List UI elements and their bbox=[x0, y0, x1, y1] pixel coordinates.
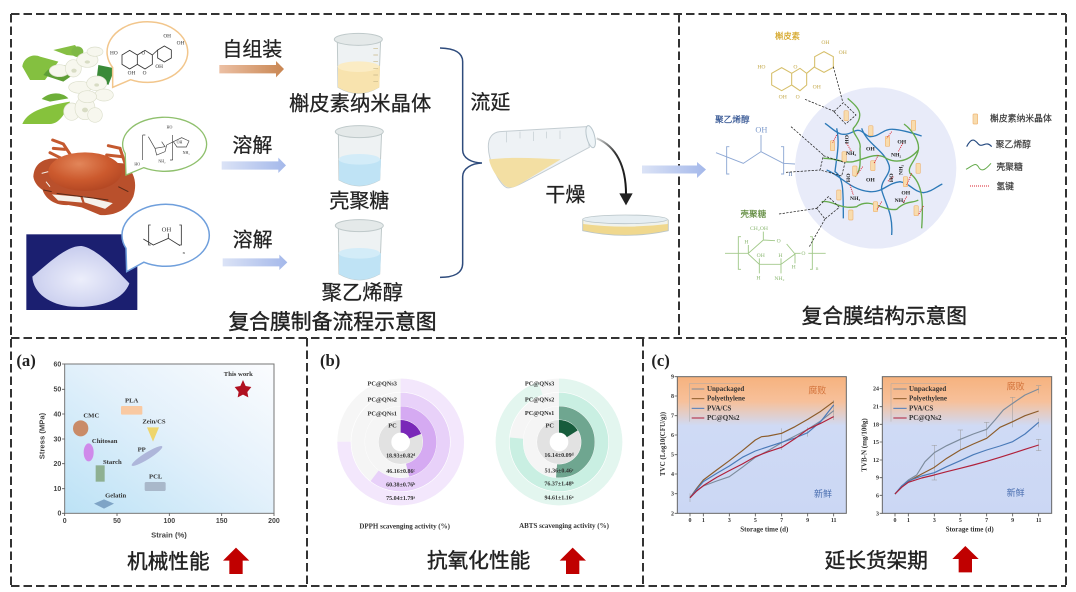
brace bbox=[440, 48, 482, 277]
chart: TVB-N: 24 bbox=[873, 387, 879, 393]
image: PVA powder bbox=[26, 234, 137, 310]
chart: TVB-N: 新鲜 bbox=[1007, 487, 1025, 498]
chart: TVB-N: Polyethylene bbox=[909, 395, 947, 403]
chart: stress vs strain: Stress (MPa) bbox=[37, 412, 46, 459]
chart: DPPH radial bars: PC@QNs1 bbox=[368, 411, 397, 418]
structure: quercetin: OH bbox=[779, 94, 787, 100]
chart: ABTS radial bars: ABTS scavenging activity (%) bbox=[519, 522, 610, 530]
icon: chitosan speech bubble: OH bbox=[177, 139, 183, 144]
circle: composite film network: OH bbox=[866, 178, 875, 184]
chart: TVC: 7 bbox=[671, 414, 674, 420]
chart: stress vs strain: 0 bbox=[57, 511, 61, 518]
structure: chitosan: O bbox=[777, 239, 781, 245]
chart: stress vs strain: 40 bbox=[54, 411, 61, 418]
chart: stress vs strain bbox=[37, 361, 280, 539]
chart: stress vs strain: 20 bbox=[54, 461, 61, 468]
icon: quercetin speech bubble: HO bbox=[110, 51, 118, 57]
chart: TVC: 3 bbox=[728, 518, 731, 524]
panel: preparation flow bbox=[22, 22, 437, 334]
structure: chitosan bbox=[725, 208, 826, 282]
chart: TVC: Polyethylene bbox=[707, 395, 745, 403]
icon: quercetin speech bubble: OH bbox=[155, 64, 163, 70]
structure: polyvinyl alcohol: n bbox=[788, 169, 792, 178]
icon: quercetin speech bubble: O bbox=[141, 50, 145, 56]
chart: TVC bbox=[659, 375, 846, 534]
chart: stress vs strain: 200 bbox=[268, 518, 280, 525]
circle: composite film network: NH₂ bbox=[891, 153, 901, 159]
structure: chitosan: CH₂OH bbox=[750, 226, 768, 232]
structure: quercetin: OH bbox=[839, 50, 847, 56]
icon: chitosan speech bubble bbox=[123, 117, 207, 175]
chart: TVB-N: 6 bbox=[876, 493, 879, 499]
chart: ABTS radial bars: 51.36±0.46ᶜ bbox=[545, 468, 574, 474]
chart: TVB-N: PVA/CS bbox=[909, 404, 933, 412]
chart: TVC: 新鲜 bbox=[814, 488, 832, 499]
label: 聚乙烯醇: 聚乙烯醇 bbox=[322, 282, 403, 305]
icon: quercetin speech bubble: O bbox=[143, 70, 147, 76]
chart: ABTS radial bars: PC@QNs2 bbox=[525, 396, 554, 403]
chart: DPPH radial bars: DPPH scavenging activity (%) bbox=[359, 522, 451, 530]
icon: PVA speech bubble bbox=[122, 204, 209, 272]
chart: TVC: 4 bbox=[671, 472, 674, 478]
chart: DPPH radial bars: 18.93±0.82ᵈ bbox=[386, 454, 415, 460]
label: (a): (a) bbox=[16, 351, 36, 370]
chart: stress vs strain: PCL bbox=[149, 473, 163, 480]
icon: quercetin speech bubble: OH bbox=[177, 41, 185, 47]
circle: composite film network: NH₂ bbox=[895, 198, 905, 204]
chart: TVC: PVA/CS bbox=[707, 404, 731, 412]
legend: structure: 壳聚糖 bbox=[996, 161, 1023, 172]
chart: ABTS radial bars: PC@QNs3 bbox=[525, 381, 554, 388]
chart: stress vs strain: 60 bbox=[54, 361, 61, 368]
chart: DPPH radial bars: PC@QNs3 bbox=[368, 381, 397, 388]
chart: stress vs strain: 0 bbox=[63, 518, 67, 525]
chart: TVB-N: Unpackaged bbox=[909, 385, 946, 393]
label: 溶解 1: 溶解 bbox=[232, 134, 272, 157]
chart: ABTS radial bars: PC bbox=[546, 422, 554, 429]
circle: composite film network: OH bbox=[843, 135, 849, 144]
arrow: up bbox=[223, 548, 249, 574]
chart: stress vs strain: 100 bbox=[164, 518, 175, 525]
icon: quercetin speech bubble: OH bbox=[163, 34, 171, 40]
circle: composite film network: OH bbox=[897, 140, 907, 146]
chart: ABTS radial bars: 76.37±1.48ᵇ bbox=[544, 482, 574, 488]
image: locust flowers and leaves bbox=[22, 45, 115, 124]
chart: TVB-N bbox=[860, 377, 1052, 534]
icon: beaker with chitosan bbox=[335, 126, 383, 186]
structure: chitosan: O bbox=[801, 251, 805, 257]
structure: chitosan: NH₂ bbox=[774, 276, 785, 282]
structure: chitosan: OH bbox=[757, 253, 765, 259]
structure: chitosan: H bbox=[744, 239, 748, 245]
chart: stress vs strain: CMC bbox=[83, 413, 99, 420]
legend: structure: 槲皮素纳米晶体 bbox=[990, 112, 1052, 123]
structure: polyvinyl alcohol: 聚乙烯醇 bbox=[715, 113, 750, 124]
chart: stress vs strain: 50 bbox=[54, 387, 61, 394]
chart: TVC: 腐败 bbox=[808, 384, 826, 395]
structure: chitosan: H bbox=[792, 264, 796, 270]
structure: polyvinyl alcohol bbox=[715, 113, 795, 178]
chart: TVC: 5 bbox=[754, 518, 757, 524]
chart: stress vs strain: Chitosan bbox=[92, 438, 118, 445]
chart: stress vs strain: This work bbox=[224, 371, 253, 378]
circle: composite film network: OH bbox=[901, 190, 911, 196]
structure: quercetin: O bbox=[793, 64, 797, 70]
image: crab bbox=[33, 140, 135, 215]
chart: TVB-N: 腐败 bbox=[1007, 380, 1025, 391]
circle: composite film network: NH₂ bbox=[850, 196, 860, 202]
panel: (c) shelf life bbox=[651, 351, 1052, 573]
arrow: up bbox=[560, 548, 586, 574]
icon: chitosan speech bubble: NH₂ bbox=[183, 150, 190, 155]
icon: PVA speech bubble: OH bbox=[162, 226, 171, 233]
chart: TVC: PC@QNs2 bbox=[707, 414, 740, 422]
chart: ABTS radial bars: 94.61±1.16ᵃ bbox=[545, 495, 574, 501]
label: 溶解 2: 溶解 bbox=[233, 228, 273, 251]
chart: DPPH radial bars bbox=[344, 381, 457, 530]
circle: composite film network: OH bbox=[887, 173, 893, 183]
chart: TVC: Unpackaged bbox=[707, 385, 744, 393]
circle: composite film network: NH₂ bbox=[899, 165, 905, 175]
chart: TVC: Storage time (d) bbox=[740, 526, 789, 534]
panel: (b) antioxidant properties bbox=[320, 351, 616, 574]
panel: film structure bbox=[715, 31, 1052, 328]
chart: ABTS radial bars bbox=[502, 381, 616, 530]
chart: stress vs strain: PLA bbox=[125, 397, 139, 404]
icon: quercetin speech bubble bbox=[107, 22, 188, 87]
label: 自组装: 自组装 bbox=[222, 38, 282, 61]
chart: DPPH radial bars: 60.38±0.76ᵇ bbox=[386, 482, 415, 488]
chart: TVC: 9 bbox=[806, 518, 809, 524]
chart: TVC: 6 bbox=[671, 433, 674, 439]
heading: 抗氧化性能: 抗氧化性能 bbox=[427, 550, 530, 573]
icon: petri dish bbox=[583, 215, 668, 235]
chart: TVB-N: PC@QNs2 bbox=[909, 414, 942, 422]
chart: TVB-N: 7 bbox=[985, 518, 988, 524]
arrow: up bbox=[952, 546, 979, 572]
chart: TVB-N: 3 bbox=[933, 518, 936, 524]
panel: casting and drying bbox=[440, 48, 668, 277]
chart: stress vs strain: 50 bbox=[113, 518, 121, 525]
heading: 延长货架期: 延长货架期 bbox=[825, 550, 928, 573]
chart: TVC: 1 bbox=[702, 518, 705, 524]
chart: TVC: 0 bbox=[688, 518, 691, 524]
structure: quercetin bbox=[757, 31, 847, 100]
chart: stress vs strain: Starch bbox=[103, 459, 122, 466]
chart: DPPH radial bars: 46.16±0.86ᶜ bbox=[386, 469, 415, 475]
arrow: pouring into dish bbox=[597, 138, 633, 205]
chart: TVB-N: 1 bbox=[907, 518, 910, 524]
circle: composite film network: OH bbox=[845, 173, 851, 183]
title: preparation flow: 复合膜制备流程示意图 bbox=[228, 311, 437, 334]
chart: TVC: 3 bbox=[671, 492, 674, 498]
panel: (a) mechanical properties bbox=[16, 351, 280, 574]
chart: TVB-N: 21 bbox=[873, 405, 879, 411]
label: 干燥: 干燥 bbox=[545, 183, 585, 206]
arrow: dissolve 1 bbox=[222, 158, 286, 173]
chart: TVB-N: 9 bbox=[1011, 518, 1014, 524]
chart: DPPH radial bars: PC bbox=[388, 423, 397, 430]
chart: TVC: 11 bbox=[831, 518, 836, 524]
chart: TVB-N: 15 bbox=[873, 440, 879, 446]
label: (b): (b) bbox=[320, 351, 340, 370]
legend: structure: 聚乙烯醇 bbox=[996, 138, 1031, 149]
label: 壳聚糖: 壳聚糖 bbox=[329, 190, 389, 213]
chart: TVB-N: 18 bbox=[873, 422, 879, 428]
label: 槲皮素纳米晶体: 槲皮素纳米晶体 bbox=[289, 92, 431, 115]
chart: ABTS radial bars: 16.14±0.09ᵈ bbox=[544, 453, 574, 459]
chart: ABTS radial bars: PC@QNs1 bbox=[525, 410, 554, 417]
circle: composite film network: OH bbox=[866, 146, 875, 152]
structure: quercetin: HO bbox=[757, 65, 766, 71]
chart: TVC: TVC (Log10(CFU/g)) bbox=[659, 411, 667, 476]
circle: composite film network: NH₂ bbox=[846, 151, 856, 157]
chart: TVB-N: Storage time (d) bbox=[946, 526, 994, 534]
legend: structure: 氢键 bbox=[996, 180, 1014, 191]
chart: TVB-N: 9 bbox=[876, 476, 879, 482]
chart: stress vs strain: Strain (%) bbox=[151, 530, 187, 539]
title: film structure: 复合膜结构示意图 bbox=[802, 305, 967, 328]
structure: quercetin: OH bbox=[821, 40, 830, 46]
structure: chitosan: H bbox=[756, 275, 760, 281]
chart: stress vs strain: 10 bbox=[54, 486, 61, 493]
structure: chitosan: n bbox=[816, 266, 819, 272]
chart: DPPH radial bars: PC@QNs2 bbox=[368, 396, 397, 403]
chart: TVC: 2 bbox=[671, 511, 674, 517]
arrow: dissolve 2 bbox=[223, 255, 287, 270]
heading: 机械性能: 机械性能 bbox=[127, 550, 210, 573]
icon: conical flask pouring bbox=[488, 125, 597, 188]
label: 流延: 流延 bbox=[470, 91, 510, 114]
chart: TVB-N: 0 bbox=[893, 518, 896, 524]
structure: chitosan: H bbox=[778, 253, 782, 259]
chart: stress vs strain: 150 bbox=[216, 518, 228, 525]
structure: quercetin: 槲皮素 bbox=[775, 31, 800, 41]
structure: quercetin: O bbox=[796, 94, 800, 100]
icon: chitosan speech bubble: NH₂ bbox=[158, 159, 166, 164]
chart: TVC: 8 bbox=[671, 394, 674, 400]
chart: TVC: 9 bbox=[671, 375, 674, 381]
chart: TVB-N: 5 bbox=[959, 518, 962, 524]
chart: TVB-N: 11 bbox=[1036, 518, 1041, 524]
label: (c): (c) bbox=[651, 351, 670, 370]
chart: TVC: 5 bbox=[671, 453, 674, 459]
chart: stress vs strain: Gelatin bbox=[105, 492, 127, 499]
icon: chitosan speech bubble: HO bbox=[134, 161, 140, 166]
chart: stress vs strain: 30 bbox=[54, 436, 61, 443]
arrow: self-assembly bbox=[219, 61, 284, 77]
arrow: to structure diagram bbox=[642, 162, 706, 178]
dashed connector lines bbox=[779, 67, 856, 247]
icon: beaker with quercetin nanocrystals bbox=[334, 33, 382, 93]
chart: TVB-N: 12 bbox=[873, 458, 879, 464]
icon: PVA speech bubble: n bbox=[183, 250, 186, 255]
chart: DPPH radial bars: 75.04±1.79ᵃ bbox=[386, 496, 415, 502]
chart: TVB-N: 3 bbox=[876, 511, 879, 517]
chart: TVB-N: TVB-N (mg/100g) bbox=[860, 418, 868, 472]
icon: chitosan speech bubble: HO bbox=[167, 124, 173, 129]
chart: TVC: 7 bbox=[780, 518, 783, 524]
chart: stress vs strain: Zein/CS bbox=[142, 418, 166, 425]
icon: beaker with PVA bbox=[335, 220, 383, 280]
structure: polyvinyl alcohol: OH bbox=[755, 125, 767, 134]
legend: structure bbox=[966, 112, 1052, 191]
chart: stress vs strain: PP bbox=[138, 446, 146, 453]
icon: quercetin speech bubble: OH bbox=[128, 70, 136, 76]
structure: chitosan: 壳聚糖 bbox=[740, 208, 767, 219]
structure: quercetin: OH bbox=[813, 84, 821, 90]
circle: composite film network bbox=[795, 87, 956, 249]
